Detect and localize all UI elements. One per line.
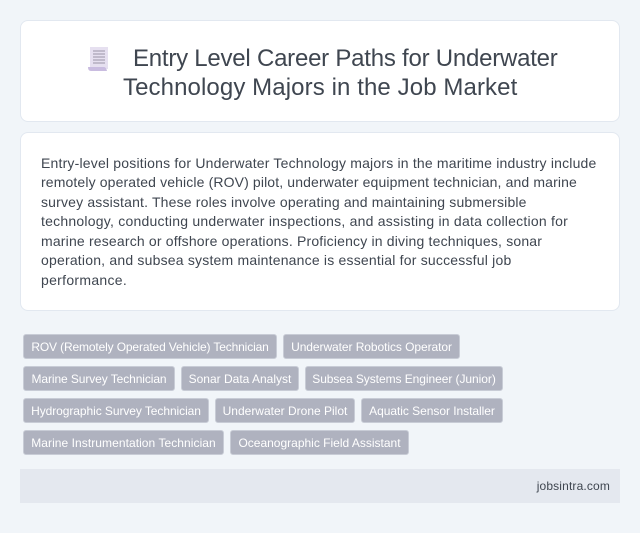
tag: Subsea Systems Engineer (Junior) <box>312 372 496 386</box>
tag <box>215 398 355 423</box>
tag: Sonar Data Analyst <box>189 372 291 386</box>
tag <box>230 430 409 455</box>
tag <box>305 366 503 391</box>
tag: Marine Survey Technician <box>31 372 167 386</box>
tag <box>283 334 460 359</box>
title text: Entry Level Career Paths for Underwater <box>133 45 558 72</box>
tag: Hydrographic Survey Technician <box>31 404 201 418</box>
tag <box>23 398 209 423</box>
icon: document scroll <box>88 47 108 71</box>
title text <box>123 45 558 101</box>
tag: Aquatic Sensor Installer <box>369 404 495 418</box>
panel: title card <box>20 20 620 122</box>
tag <box>361 398 503 423</box>
tag: Underwater Drone Pilot <box>223 404 347 418</box>
description text: marine research or offshore operations. Proficiency in diving techniques, sonar <box>41 233 542 249</box>
description text: operation, and subsea system maintenance is essential for successful job <box>41 252 511 268</box>
description text <box>41 155 597 288</box>
tag: Oceanographic Field Assistant <box>238 436 401 450</box>
tag list <box>23 334 503 455</box>
title text: Technology Majors in the Job Market <box>123 74 517 101</box>
description text: remotely operated vehicle (ROV) pilot, underwater equipment technician, and marine <box>41 174 577 190</box>
panel: description <box>20 132 620 311</box>
tag <box>23 430 224 455</box>
footer source text: jobsintra.com <box>537 479 610 493</box>
description text: performance. <box>41 272 127 288</box>
description text: technology, conducting underwater inspections, and assisting in data collection for <box>41 213 568 229</box>
tag <box>23 366 175 391</box>
footer bar <box>20 469 620 503</box>
tag <box>23 334 277 359</box>
tag: Underwater Robotics Operator <box>291 340 452 354</box>
tag: Marine Instrumentation Technician <box>31 436 216 450</box>
description text: survey assistant. These roles involve operating and maintaining submersible <box>41 194 527 210</box>
tag <box>181 366 299 391</box>
description text: Entry-level positions for Underwater Technology majors in the maritime industry include <box>41 155 597 171</box>
tag: ROV (Remotely Operated Vehicle) Technician <box>31 340 269 354</box>
